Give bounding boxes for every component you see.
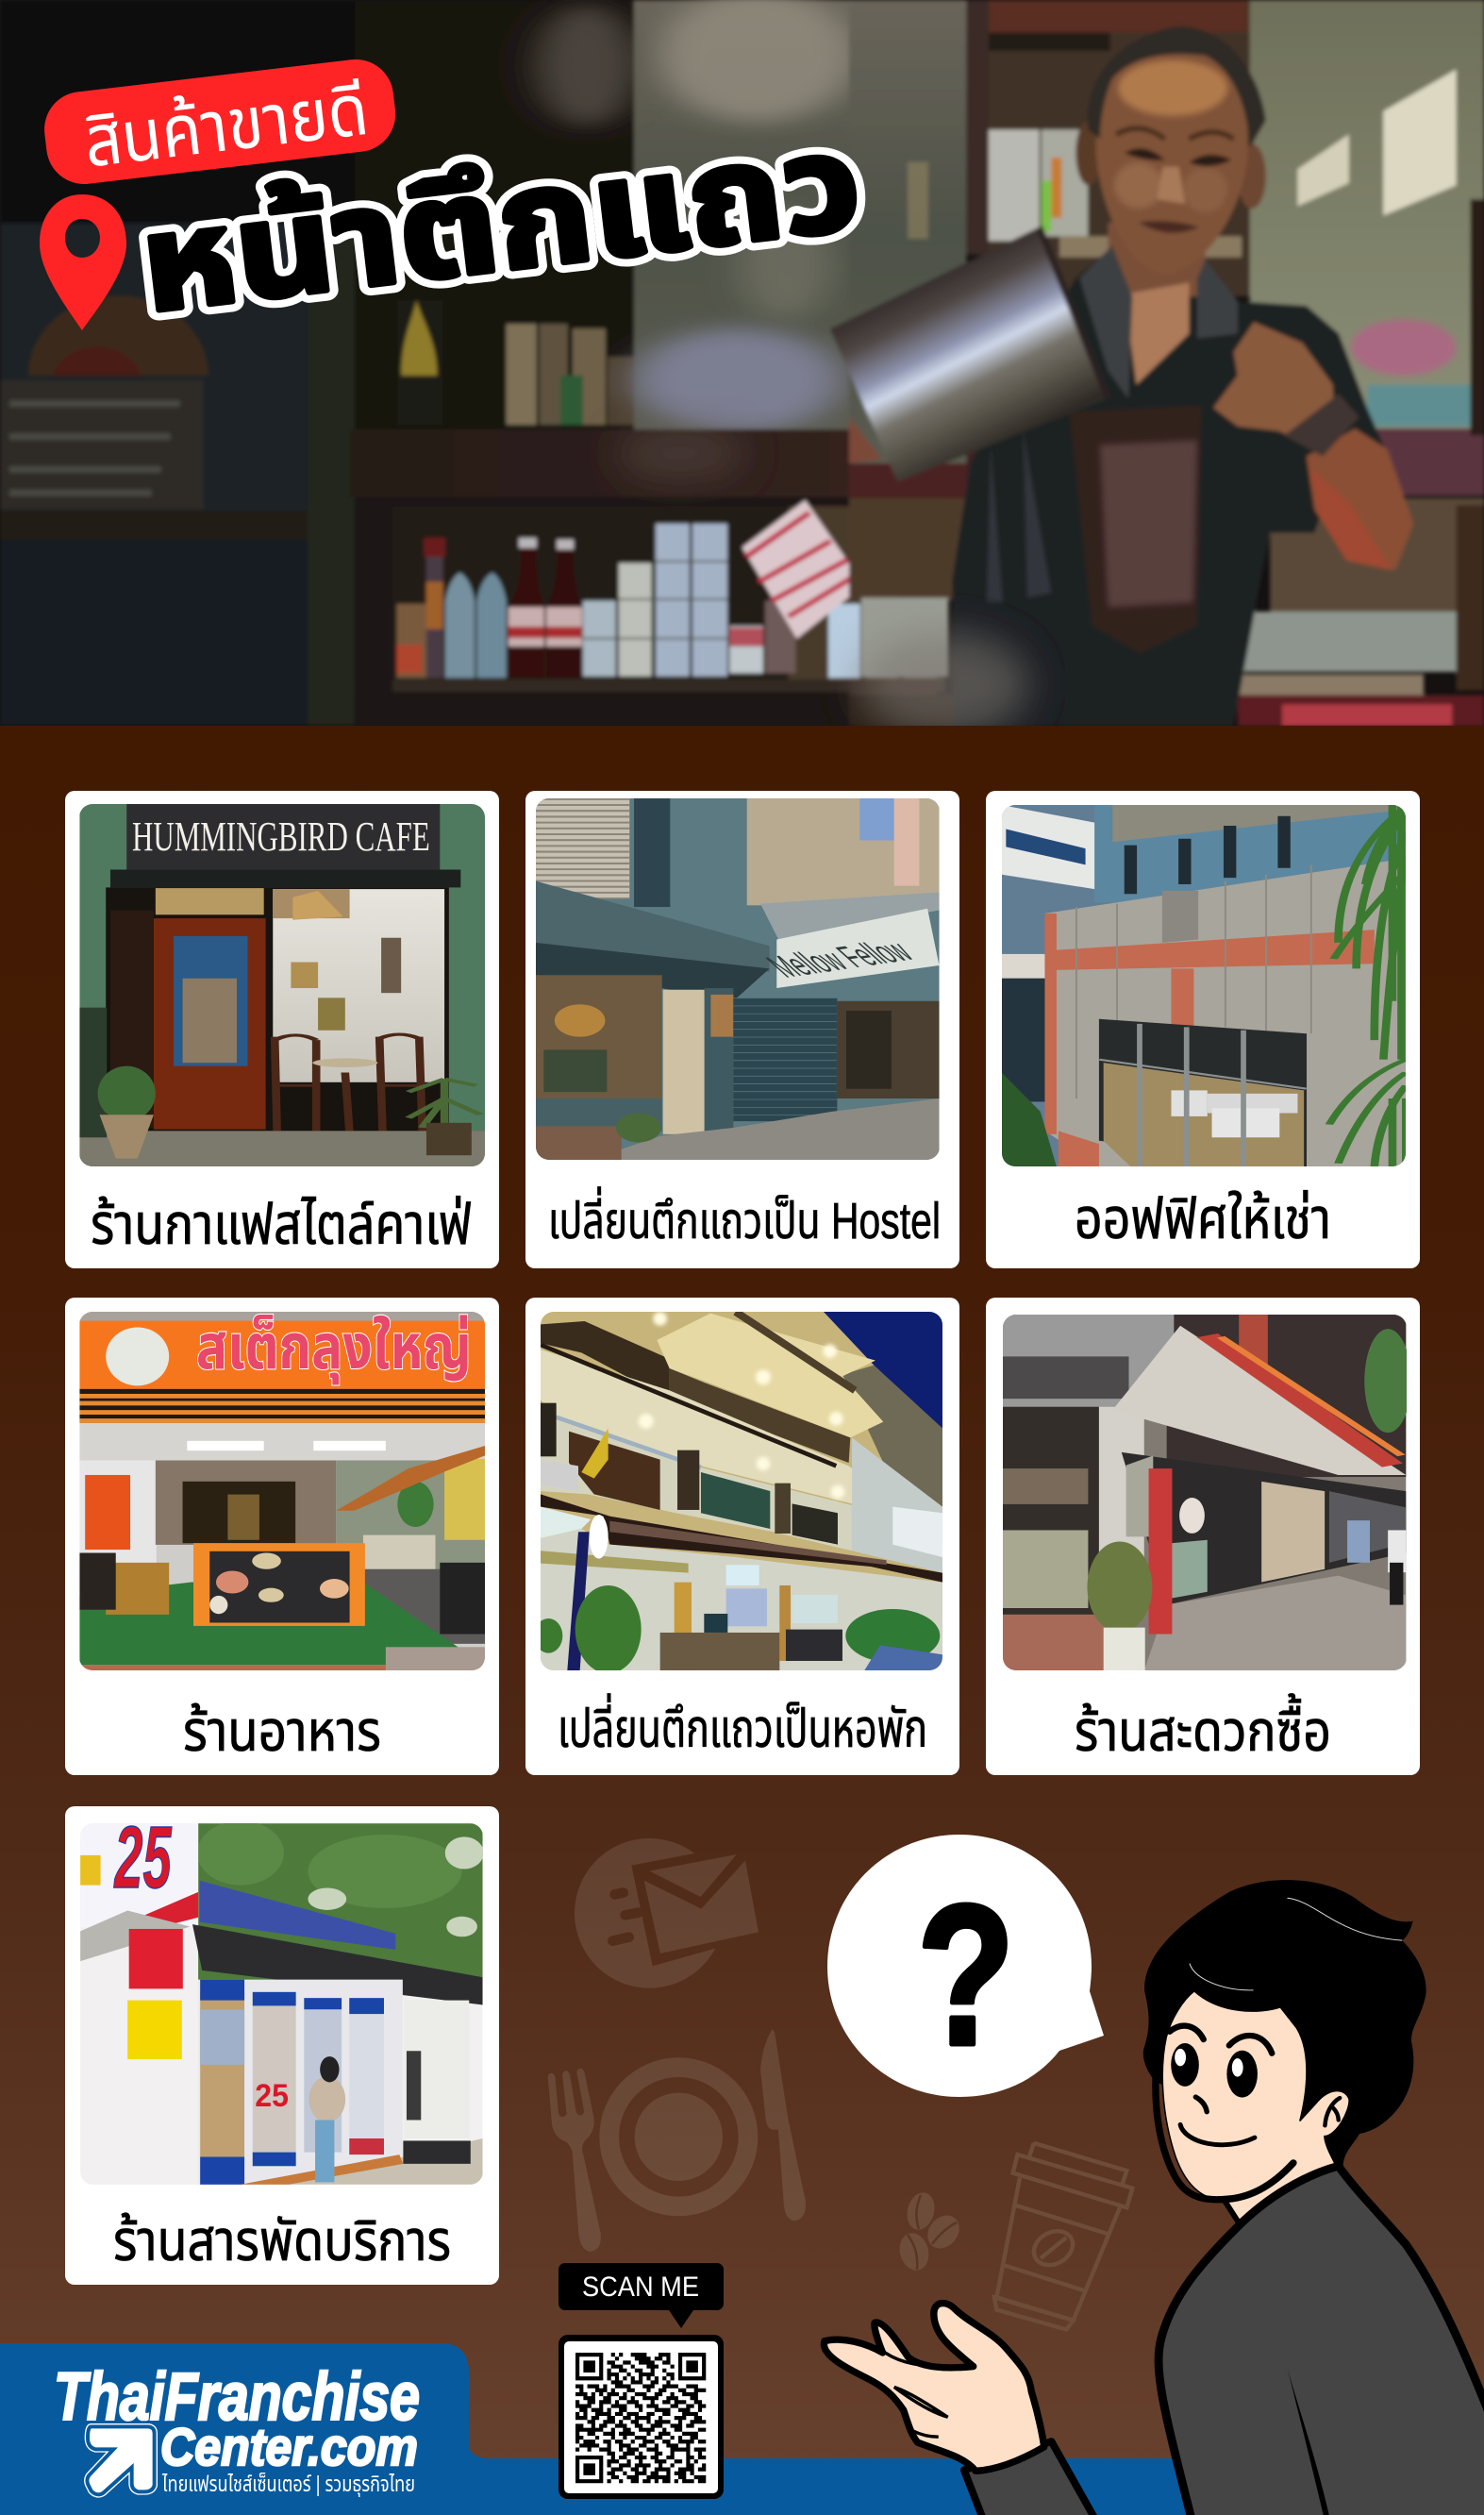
photo: dormitory building at dusk <box>534 1312 942 1673</box>
blue footer shape <box>0 2343 1484 2515</box>
photo: parcel service shop: 25 <box>255 2078 289 2114</box>
background icon: mail <box>575 1838 759 1987</box>
label: ออฟฟิศให้เช่า <box>1075 1187 1331 1250</box>
background icon: fork, plate and knife <box>548 2030 806 2252</box>
hand <box>824 2304 1044 2471</box>
label: ร้านอาหาร <box>183 1700 381 1763</box>
icon: arrow <box>89 2428 153 2492</box>
QR code <box>559 2335 724 2499</box>
card: ร้านอาหาร <box>65 1298 499 1775</box>
right side background and man <box>830 0 1484 727</box>
scan me tag <box>559 2263 724 2328</box>
label: ร้านสะดวกซื้อ <box>1075 1693 1331 1763</box>
background icon: coffee beans <box>895 2189 966 2273</box>
location pin icon <box>40 194 126 330</box>
card: เปลี่ยนตึกแถวเป็นหอพัก <box>525 1298 959 1775</box>
card: เปลี่ยนตึกแถวเป็น Hostel <box>525 791 959 1268</box>
speech bubble with question mark: ? <box>917 1863 1015 2087</box>
logo: ThaiFranchise Center.com: ไทยแฟรนไชส์เซ็นเตอร์ | รวมธุรกิจไทย <box>161 2472 415 2497</box>
photo: office building <box>1002 805 1406 1166</box>
shirt <box>1159 2166 1484 2515</box>
scan me tag: SCAN ME <box>582 2272 699 2303</box>
card: ออฟฟิศให้เช่า <box>986 791 1420 1268</box>
background icon: takeaway coffee cup <box>994 2143 1132 2330</box>
photo: parcel service shop: 25 <box>113 1809 172 1907</box>
label: ร้านกาแฟสไตล์คาเฟ่ <box>91 1193 472 1256</box>
page background <box>0 726 1484 2515</box>
sleeve <box>964 2441 1101 2515</box>
hair <box>1143 1880 1426 2166</box>
logo: ThaiFranchise Center.com: Center.com <box>160 2417 418 2476</box>
card: ร้านสะดวกซื้อ <box>986 1298 1420 1775</box>
text: HUMMINGBIRD CAFE <box>132 813 430 860</box>
photo: Hummingbird cafe <box>79 804 485 1166</box>
photo: parcel service shop <box>80 1809 484 2185</box>
card: ร้านกาแฟสไตล์คาเฟ่ <box>65 791 499 1268</box>
heading tag: สินค้าขายดี: สินค้าขายดี <box>80 70 373 183</box>
text: สเต็กลุงใหญ่ <box>196 1311 472 1385</box>
character: man with raised hand <box>824 1880 1484 2515</box>
speech bubble with question mark <box>827 1835 1104 2097</box>
logo: ThaiFranchise Center.com <box>54 2360 420 2497</box>
lower shelf goods <box>355 497 944 727</box>
logo: ThaiFranchise Center.com: ThaiFranchise <box>54 2360 420 2435</box>
label: ร้านสารพัดบริการ <box>113 2209 451 2272</box>
photo: Mellow Fellow hostel <box>536 798 940 1160</box>
photo: steak restaurant <box>79 1311 485 1670</box>
card: ร้านสารพัดบริการ <box>65 1806 499 2285</box>
facial features <box>1156 2026 1340 2223</box>
label: เปลี่ยนตึกแถวเป็นหอพัก <box>558 1693 927 1758</box>
hero photo: tea master pouring in shophouse cafe <box>0 0 1484 736</box>
photo: convenience store <box>1003 1315 1411 1670</box>
main heading: หน้าตึกแถว: หน้าตึกแถว <box>133 108 868 341</box>
text: Mellow Fellow <box>757 933 923 984</box>
face and neck <box>1162 1991 1349 2222</box>
label: เปลี่ยนตึกแถวเป็น Hostel <box>548 1186 941 1249</box>
main heading: หน้าตึกแถว: หน้าตึกแถว <box>133 108 868 341</box>
